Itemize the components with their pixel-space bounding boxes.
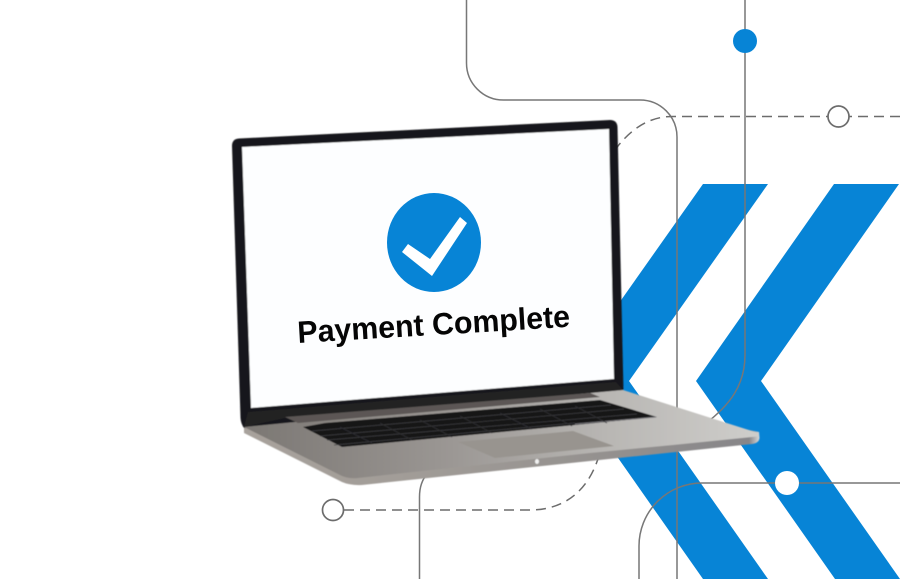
laptop hinge strip [285, 393, 600, 423]
laptop trackpad [458, 431, 614, 458]
laptop lid bezel [232, 120, 624, 428]
chevron: right blue [696, 184, 900, 579]
icon: blue node [733, 29, 757, 53]
laptop latch [535, 459, 539, 464]
icon: white node [775, 471, 799, 495]
laptop base top [244, 390, 759, 478]
chevron: left blue [564, 184, 768, 579]
line: dashed upper [612, 116, 900, 154]
laptop screen [242, 129, 614, 408]
laptop base edge [244, 400, 760, 485]
check circle [387, 193, 481, 292]
line: dashed lower [344, 452, 600, 510]
line: lower right rounded [639, 483, 900, 579]
line: upper circuit [466, 0, 677, 579]
line: vertical with curve [705, 0, 745, 424]
check mark [402, 217, 467, 276]
laptop keyboard [303, 400, 657, 447]
laptop body [232, 120, 760, 485]
laptop [232, 120, 760, 485]
icon: hollow node lower [322, 500, 344, 520]
line: lower vertical [420, 472, 428, 579]
payment complete text: Payment Complete [296, 299, 571, 350]
icon: hollow node upper [828, 106, 849, 127]
laptop lid lower band [244, 382, 623, 427]
